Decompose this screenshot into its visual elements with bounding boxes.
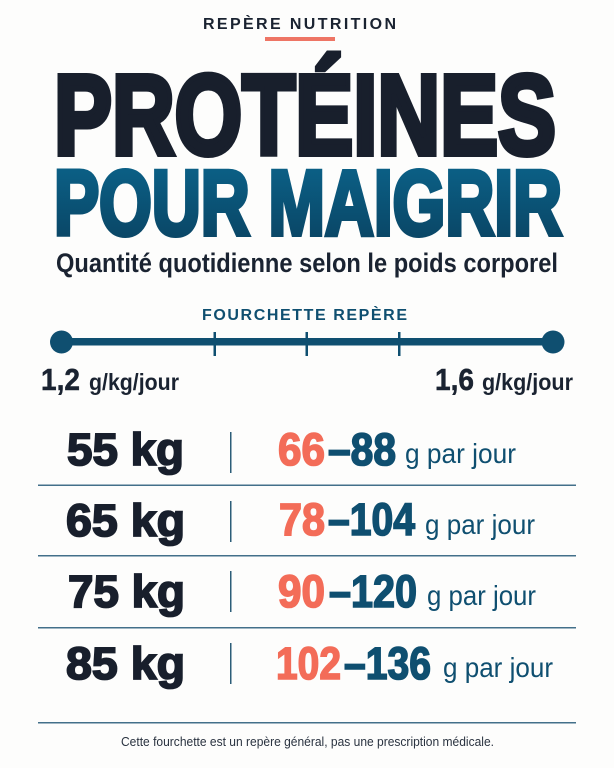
eyebrow: Repère Nutrition: REPÈRE NUTRITION: [203, 14, 396, 33]
row: 85 kg: g par jour: [443, 652, 553, 683]
footnote: Cette fourchette est un repère général, pas une prescription médicale.: [121, 735, 494, 749]
accent underline: [265, 37, 335, 41]
row: 65 kg: 78: [279, 494, 325, 545]
row: 75 kg: –120: [329, 566, 417, 617]
scale line with ticks and end dots: [50, 330, 564, 356]
scale minimum label: g/kg/jour: [89, 369, 179, 395]
scale maximum label: g/kg/jour: [482, 369, 573, 395]
divider: [38, 484, 576, 486]
row: 55 kg: 55 kg: [67, 424, 184, 475]
row: 85 kg: –136: [344, 638, 431, 689]
subtitle: Quantité quotidienne selon le poids corporel: [56, 248, 558, 278]
row: 55 kg: –88: [328, 424, 396, 475]
divider: [38, 555, 576, 556]
scale maximum label: [435, 362, 573, 397]
range scale: [41, 305, 573, 397]
row: 55 kg: g par jour: [405, 438, 516, 469]
row: 65 kg: [66, 494, 535, 546]
row: 55 kg: 66: [278, 424, 325, 475]
scale minimum label: 1,2: [41, 362, 80, 397]
row: 75 kg: 90: [278, 566, 325, 617]
row: 65 kg: 65 kg: [66, 495, 185, 546]
row: 75 kg: g par jour: [427, 580, 536, 611]
row: 65 kg: –104: [328, 494, 415, 545]
row: 85 kg: 102: [276, 638, 341, 689]
row: 65 kg: g par jour: [425, 509, 535, 540]
row: 85 kg: [66, 638, 553, 689]
scale heading: FOURCHETTE REPÈRE: [202, 305, 407, 324]
row: 85 kg: 85 kg: [66, 638, 185, 689]
row: 55 kg: [67, 424, 516, 475]
scale maximum label: 1,6: [435, 362, 474, 397]
scale minimum label: [41, 362, 179, 397]
row: 75 kg: [68, 566, 536, 617]
divider: [38, 627, 576, 628]
row: 75 kg: 75 kg: [68, 566, 185, 617]
bottom divider: [38, 722, 576, 724]
